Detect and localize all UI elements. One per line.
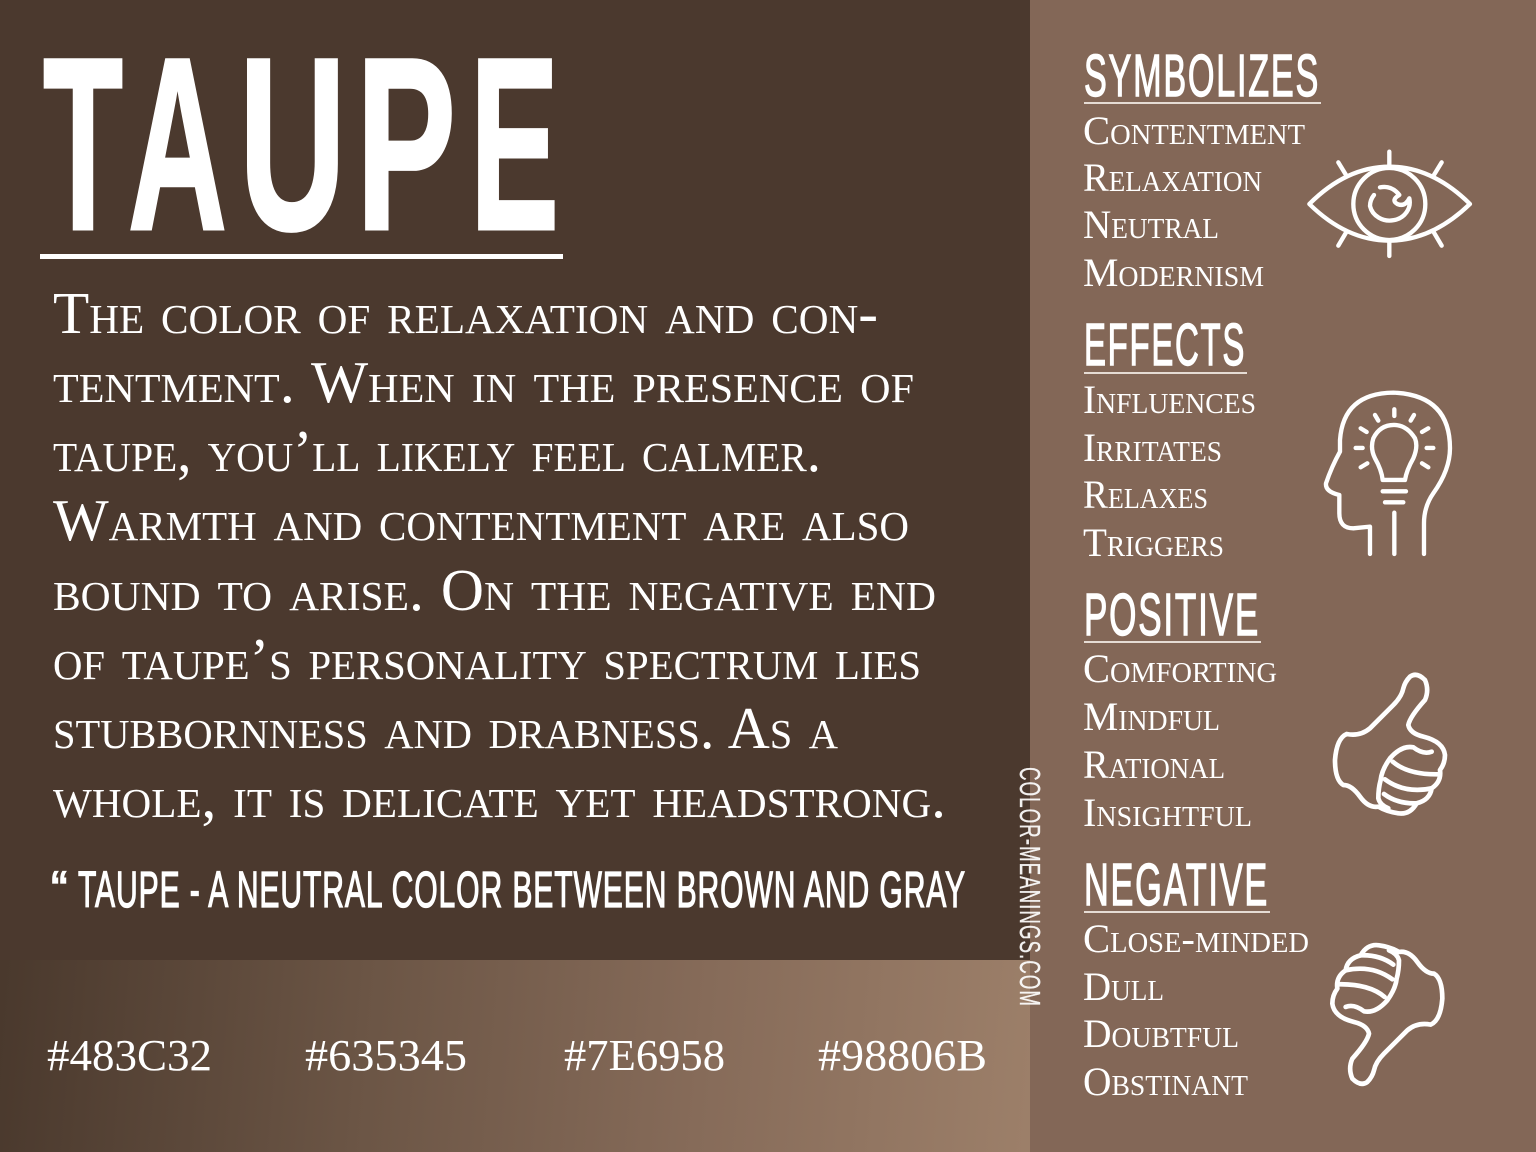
text block: description: taupe, you’ll likely feel calmer. [53,418,821,484]
list: negative items: Doubtful [1083,1011,1239,1056]
panel: effects [1083,312,1256,565]
icon: head with light bulb [1326,393,1450,554]
icon: thumbs up [1335,675,1445,814]
list: effects items: Triggers [1083,520,1224,565]
quote line [51,861,966,918]
quote line: “ [51,861,69,918]
title: P [356,7,456,282]
title underline [40,254,563,259]
title: U [239,7,346,282]
panel: negative [1083,852,1309,1104]
panel: symbolizes [1083,43,1321,295]
icon: eye [1309,152,1470,256]
list: positive items: Insightful [1083,790,1252,835]
title: E [470,7,559,282]
colour hex codes: #7E6958 [564,1031,725,1080]
heading: effects: EFFECTS [1084,312,1246,378]
title [43,7,559,282]
list: effects items [1083,377,1256,565]
list: negative items: Obstinant [1083,1059,1248,1104]
list: positive items: Comforting [1083,646,1277,691]
list: symbolizes items: Relaxation [1083,155,1262,200]
heading: negative: NEGATIVE [1084,852,1269,918]
text block: description: The color of relaxation and con- [53,280,878,346]
heading: positive: POSITIVE [1084,582,1260,648]
colour hex codes: #635345 [305,1031,467,1080]
text block: description: whole, it is delicate yet headstrong. [53,764,946,830]
list: effects items: Relaxes [1083,472,1208,517]
text block: description: bound to arise. On the negative end [53,557,936,623]
list: symbolizes items: Modernism [1083,250,1264,295]
text block: description: tentment. When in the presence of [53,349,914,415]
text block: description: of taupe’s personality spectrum lies [53,626,921,692]
title: A [128,7,227,282]
text block: description: Warmth and contentment are also [53,487,909,553]
text block: description: stubbornness and drabness. As a [53,695,838,761]
list: symbolizes items: Contentment [1083,108,1305,153]
heading: symbolizes: SYMBOLIZES [1084,43,1320,109]
colour hex codes: #483C32 [47,1031,212,1080]
list: effects items: Irritates [1083,425,1222,470]
colour hex codes: #98806B [818,1031,987,1080]
list: negative items: Dull [1083,964,1164,1009]
list: symbolizes items [1083,108,1305,295]
panel: positive [1083,582,1277,835]
list: positive items: Rational [1083,742,1225,787]
list: positive items: Mindful [1083,694,1220,739]
icon: thumbs down [1332,945,1442,1084]
panel: gradient colour strip [0,960,1030,1152]
vertical website credit: COLOR-MEANINGS.COM [1013,767,1045,1007]
list: negative items [1083,916,1309,1104]
panel: right sidebar background [1030,0,1536,1152]
panel: left dark background [0,0,1030,1152]
title: T [43,7,123,282]
colour hex codes [47,1031,987,1080]
list: symbolizes items: Neutral [1083,202,1219,247]
text block: description [53,280,946,830]
list: negative items: Close-minded [1083,916,1309,961]
list: effects items: Influences [1083,377,1256,422]
list: positive items [1083,646,1277,835]
